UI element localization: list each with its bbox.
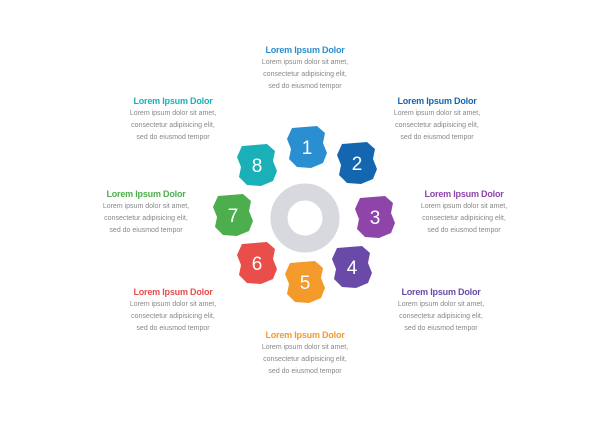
text block 3: Lorem Ipsum Dolor	[424, 189, 504, 199]
text block 2: consectetur adipisicing elit,	[395, 122, 479, 129]
text block 4: sed do eiusmod tempor	[404, 325, 478, 332]
text block 5	[262, 330, 348, 375]
blob 5: 5	[300, 273, 310, 294]
text block 8: Lorem ipsum dolor sit amet,	[130, 110, 216, 117]
text block 8	[130, 96, 216, 141]
text block 7: Lorem Ipsum Dolor	[106, 189, 186, 199]
blob 7: 7	[228, 206, 238, 227]
blob 8	[237, 144, 277, 186]
text block 4: Lorem Ipsum Dolor	[401, 287, 481, 297]
text block 8: Lorem Ipsum Dolor	[133, 96, 213, 106]
text block 6: Lorem Ipsum Dolor	[133, 287, 213, 297]
blob 1	[287, 126, 327, 168]
text block 3: sed do eiusmod tempor	[427, 227, 501, 234]
text block 7	[103, 189, 189, 234]
text block 7: sed do eiusmod tempor	[109, 227, 183, 234]
blob 3: 3	[370, 208, 380, 229]
text block 8: sed do eiusmod tempor	[136, 134, 210, 141]
blob 1: 1	[302, 138, 312, 159]
text block 7: consectetur adipisicing elit,	[104, 215, 188, 222]
blob 6	[237, 242, 277, 284]
blob 8: 8	[252, 156, 262, 177]
text block 4: Lorem ipsum dolor sit amet,	[398, 301, 484, 308]
text block 1: Lorem ipsum dolor sit amet,	[262, 59, 348, 66]
text block 2: Lorem Ipsum Dolor	[397, 96, 477, 106]
text block 1: sed do eiusmod tempor	[268, 83, 342, 90]
blob 7	[213, 194, 253, 236]
text block 4	[398, 287, 484, 332]
text block 6: consectetur adipisicing elit,	[131, 313, 215, 320]
blob 5	[285, 261, 325, 303]
text block 6	[130, 287, 216, 332]
blob 6: 6	[252, 254, 262, 275]
text block 1: consectetur adipisicing elit,	[263, 71, 347, 78]
text block 5: consectetur adipisicing elit,	[263, 356, 347, 363]
text block 5: Lorem ipsum dolor sit amet,	[262, 344, 348, 351]
text block 4: consectetur adipisicing elit,	[399, 313, 483, 320]
text block 2	[394, 96, 480, 141]
text block 6: Lorem ipsum dolor sit amet,	[130, 301, 216, 308]
text block 3: consectetur adipisicing elit,	[422, 215, 506, 222]
text block 6: sed do eiusmod tempor	[136, 325, 210, 332]
blob 3	[355, 196, 395, 238]
text block 3: Lorem ipsum dolor sit amet,	[421, 203, 507, 210]
text block 5: sed do eiusmod tempor	[268, 368, 342, 375]
text block 7: Lorem ipsum dolor sit amet,	[103, 203, 189, 210]
blob 2: 2	[352, 154, 362, 175]
text block 2: Lorem ipsum dolor sit amet,	[394, 110, 480, 117]
text block 8: consectetur adipisicing elit,	[131, 122, 215, 129]
blob 4: 4	[347, 258, 358, 279]
blob 4	[332, 246, 372, 288]
blob 2	[337, 142, 377, 184]
ring	[279, 192, 331, 244]
text block 1: Lorem Ipsum Dolor	[265, 45, 345, 55]
text block 2: sed do eiusmod tempor	[400, 134, 474, 141]
text block 1	[262, 45, 348, 90]
text block 5: Lorem Ipsum Dolor	[265, 330, 345, 340]
text block 3	[421, 189, 507, 234]
